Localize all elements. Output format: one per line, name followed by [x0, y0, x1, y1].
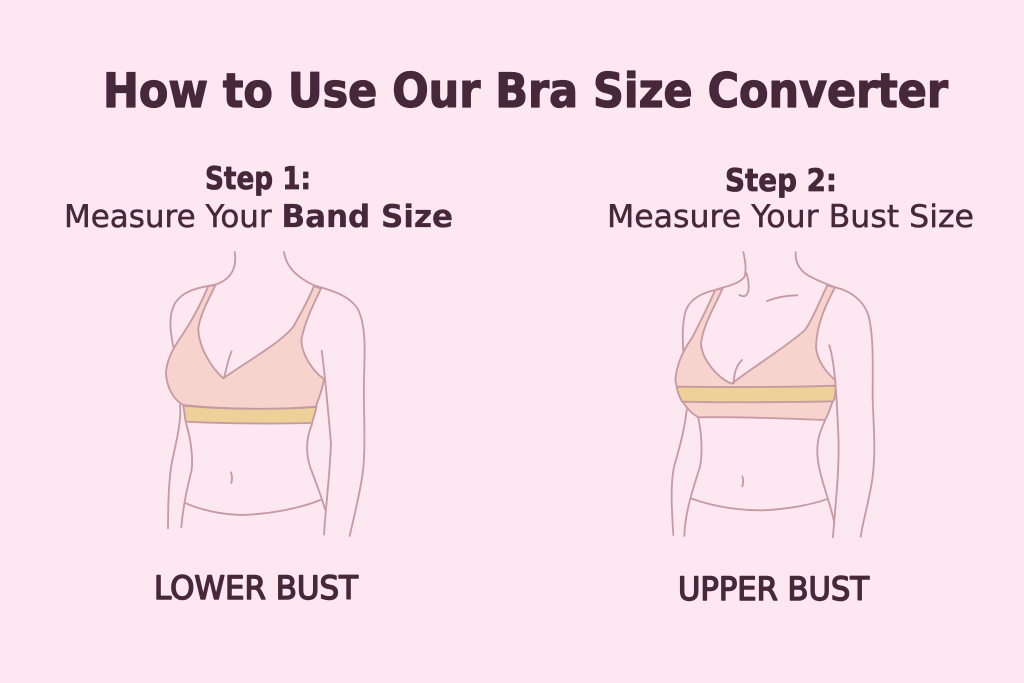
step 2 heading: Step 2: [725, 163, 837, 199]
step 1 heading: Step 1: [205, 161, 311, 197]
step 2 heading: Measure Your Bust Size [607, 199, 974, 235]
bra body 2 [675, 285, 835, 420]
step 2 heading [607, 163, 974, 235]
label: lower bust: LOWER BUST [154, 569, 358, 607]
step 1 heading: Measure Your Band Size [64, 199, 453, 235]
measuring band 2 [677, 386, 836, 402]
step 1 heading [64, 161, 453, 235]
figure 2: upper bust illustration [672, 252, 874, 537]
body outline 2 [683, 252, 746, 352]
label: upper bust: UPPER BUST [678, 570, 869, 608]
measuring band 1 [183, 406, 317, 423]
figure 1: lower bust illustration [166, 252, 365, 536]
body outline 1 [170, 252, 235, 347]
title: How to Use Our Bra Size Converter [103, 64, 949, 119]
bra body 1 [166, 285, 324, 409]
